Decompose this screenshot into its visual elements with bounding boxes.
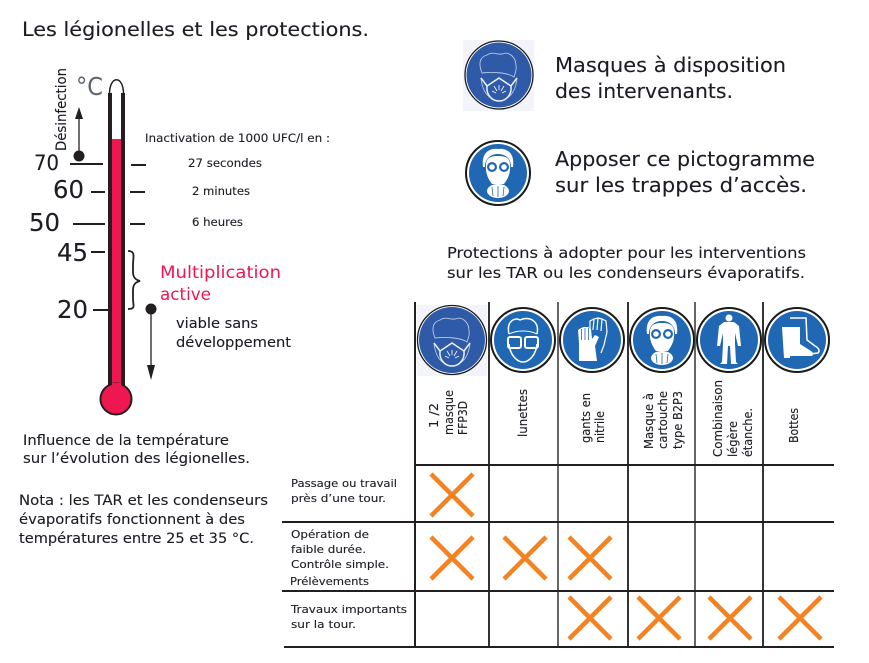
caption: influence de la température: sur l’évolution des légionelles. <box>23 451 250 467</box>
temperature scale numbers <box>29 151 88 324</box>
temperature scale numbers: 45 <box>57 238 88 267</box>
column header: half mask: 1 /2 <box>427 403 441 428</box>
label: viable sans développement: viable sans <box>176 316 258 332</box>
heading: protections à adopter: sur les TAR ou les condenseurs évaporatifs. <box>447 264 805 282</box>
icon: gloves <box>560 308 624 372</box>
text: apposer ce pictogramme: sur les trappes d’accès. <box>555 173 807 197</box>
temperature scale numbers: 60 <box>53 175 84 204</box>
arrow: up from 70 degrees <box>74 107 84 162</box>
unit label: °C <box>76 72 103 101</box>
panel: protection table <box>282 302 834 647</box>
temperature scale numbers: 70 <box>34 151 59 175</box>
temperature scale numbers: 20 <box>57 295 88 324</box>
scale ticks right <box>130 165 146 224</box>
inactivation times <box>145 131 330 229</box>
label: viable sans développement <box>176 316 292 351</box>
column header: combinaison <box>711 380 755 457</box>
icon: cartridge mask <box>630 308 694 372</box>
column header: bottes: Bottes <box>787 408 801 443</box>
title: Les légionelles et les protections. <box>22 18 369 41</box>
row label: opération <box>290 528 389 588</box>
note: nota: températures entre 25 et 35 °C. <box>19 531 254 547</box>
label: multiplication active: active <box>160 285 211 305</box>
icon: cartridge mask pictogram, top <box>466 141 530 205</box>
text: masques à disposition: des intervenants. <box>555 79 733 103</box>
arrow: down from 20 degrees <box>146 304 156 380</box>
note: nota: Nota : les TAR et les condenseurs <box>19 493 268 509</box>
thermometer tube <box>100 80 132 414</box>
row label: travaux <box>290 603 407 631</box>
icon: glasses <box>491 308 555 372</box>
inactivation times: 27 secondes <box>188 156 262 170</box>
row label: passage <box>291 477 397 505</box>
row label: travaux: Travaux importants <box>290 603 407 616</box>
icon: boots <box>765 308 829 372</box>
column header: masque à cartouche <box>642 391 685 449</box>
icon: mask pictogram, top <box>463 40 534 111</box>
caption: influence de la température <box>23 433 250 467</box>
inactivation times: 6 heures <box>192 215 243 229</box>
inactivation times: Inactivation de 1000 UFC/l en : <box>145 131 330 145</box>
table grid <box>282 302 834 647</box>
row label: opération: Opération de <box>291 528 369 541</box>
column header: gants <box>579 393 607 443</box>
row label: opération: faible durée. <box>291 543 366 556</box>
orange crosses: row 1 <box>431 474 473 516</box>
heading: protections à adopter: Protections à adopter pour les interventions <box>447 244 806 262</box>
icon: half mask <box>417 305 487 376</box>
column header: gants: gants en <box>579 393 593 443</box>
orange crosses: row 2 <box>431 537 611 579</box>
icon: protective suit <box>697 308 761 372</box>
column header: gants: nitrile <box>593 411 607 443</box>
label: viable sans développement: développement <box>176 335 292 351</box>
column header: lunettes: lunettes <box>516 389 530 437</box>
label: multiplication active: Multiplication <box>160 263 281 283</box>
column header: half mask: FFP3D <box>456 401 470 435</box>
inactivation times: 2 minutes <box>192 184 250 198</box>
note: nota <box>19 493 268 547</box>
row label: passage: près d’une tour. <box>291 492 386 505</box>
column header: masque à cartouche: type B2P3 <box>671 391 685 449</box>
column header: masque à cartouche: cartouche <box>656 391 670 449</box>
column header: half mask <box>427 390 470 435</box>
heading: protections à adopter <box>447 244 806 282</box>
temperature scale numbers: 50 <box>29 208 60 237</box>
caption: influence de la température: Influence de la température <box>23 433 229 449</box>
row label: opération: Prélèvements <box>290 575 369 588</box>
column header: half mask: masque <box>442 390 456 435</box>
row label: travaux: sur la tour. <box>291 618 356 631</box>
label: désinfection: Désinfection <box>54 68 70 151</box>
brace: active range <box>128 251 140 309</box>
scale ticks left <box>70 164 108 310</box>
column header: combinaison: étanche. <box>741 408 755 457</box>
panel: thermometer <box>29 68 330 414</box>
column header: combinaison: légère <box>726 421 740 457</box>
label: multiplication active <box>160 263 281 305</box>
row label: passage: Passage ou travail <box>291 477 397 490</box>
column header: masque à cartouche: Masque à <box>642 393 656 449</box>
text: masques à disposition <box>555 53 786 103</box>
text: apposer ce pictogramme: Apposer ce pictogramme <box>555 147 815 171</box>
row label: opération: Contrôle simple. <box>291 558 389 571</box>
text: apposer ce pictogramme <box>555 147 815 197</box>
note: nota: évaporatifs fonctionnent à des <box>19 512 245 528</box>
text: masques à disposition: Masques à disposition <box>555 53 786 77</box>
orange crosses: row 3 <box>569 597 821 639</box>
column header: combinaison: Combinaison <box>711 380 725 457</box>
